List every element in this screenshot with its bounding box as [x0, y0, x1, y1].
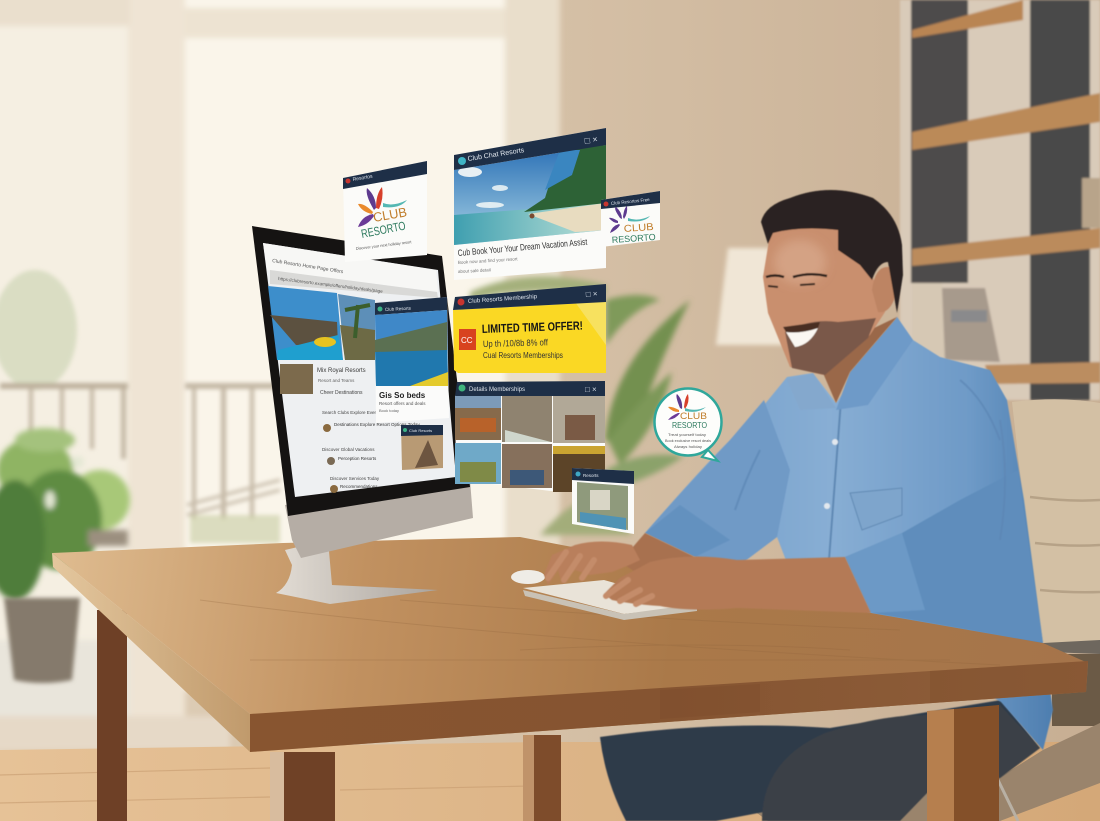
page text column: Recommendations [340, 484, 378, 489]
monitor stand [276, 540, 438, 604]
man: trousers [600, 700, 1040, 821]
floating ad: beach vacation card [454, 128, 606, 280]
table top [52, 537, 1088, 752]
plant behind floating ads [470, 276, 690, 535]
page text column [280, 364, 420, 493]
floating ad: small logo card: CLUB [623, 222, 654, 235]
floating ad: limited time offer banner: LIMITED TIME OFFER! [482, 318, 583, 336]
browser toolbar: Club Resorto Home Page Offers [272, 258, 344, 275]
floating ad: limited time offer banner: □ × [586, 289, 598, 299]
bookshelf [900, 0, 1100, 400]
page text column: Mix Royal Resorts [317, 368, 366, 374]
speech bubble logo [654, 388, 722, 461]
floating ad: club resorto logo card [343, 161, 427, 262]
table legs back [97, 610, 561, 821]
screen overlay ad card [375, 297, 449, 423]
screen overlay ad card: Resort offers and deals [379, 401, 426, 406]
floating ad: small logo card: Club Resortos Free [611, 197, 650, 206]
page text column: Search Clubs Explore Events [322, 410, 381, 415]
floating ad: small photo card [572, 468, 634, 534]
floating ad: club resorto logo card: CLUB [372, 204, 408, 225]
floating ad: club resorto logo card: Discover your next holiday resort [356, 239, 413, 251]
monitor [252, 226, 473, 604]
sleeve and cuff of right arm [845, 470, 1043, 643]
monitor bezel [252, 226, 470, 516]
floating ad: club resorto logo card: RESORTO [360, 219, 407, 241]
speech bubble logo: Treat yourself today [668, 433, 706, 437]
sleeve of left arm [645, 400, 790, 567]
keyboard [523, 580, 697, 620]
floating ad: limited time offer banner: Cual Resorts Memberships [483, 351, 563, 360]
balcony railing and greenery outside window [0, 270, 280, 543]
speech bubble logo: Book exclusive resort deals [665, 439, 711, 443]
floating ad: beach vacation card: □ × [584, 134, 598, 146]
monitor chin [285, 480, 473, 558]
screen overlay ad card: Gis So beds [379, 391, 426, 400]
chair [707, 399, 1100, 821]
floating ad: beach vacation card: Club Chat Resorts [467, 147, 525, 163]
floating ad: photo gallery card: □ × [585, 385, 597, 394]
shirt collar [836, 317, 913, 410]
speech bubble logo: RESORTO [672, 421, 707, 430]
mouse [511, 570, 545, 584]
page text column: Discover Global Vacations [322, 447, 375, 452]
speech bubble logo: Always holiday [674, 445, 702, 449]
page text column: Resort and Teams [318, 378, 355, 383]
floating ad: limited time offer banner: Up th /10/8b 8% off [483, 337, 548, 349]
page text column: Perception Resorts [338, 456, 377, 461]
hero photo: pool [268, 286, 375, 360]
floor [0, 742, 1100, 821]
man: shirt [645, 317, 1053, 750]
floating ad: small photo card: Resorts [583, 473, 599, 478]
man: head [761, 190, 903, 403]
table lamp [716, 248, 790, 345]
floating ad: limited time offer banner [453, 284, 606, 373]
gallery photos [455, 396, 605, 492]
screen small ad card [401, 425, 443, 470]
beach photo [454, 145, 606, 245]
monitor screen [263, 243, 456, 497]
floating ad: limited time offer banner: CC [461, 336, 473, 345]
floating ad: small logo card: RESORTO [611, 232, 656, 245]
screen small ad card: Club Resorts [409, 428, 432, 433]
screen overlay ad card: Book today [379, 408, 399, 413]
page text column: Cheer Destinations [320, 390, 363, 396]
floating ad: photo gallery card [455, 381, 605, 492]
man: arms and hands [544, 533, 871, 613]
floating ad: small logo card [601, 191, 660, 247]
table legs front [270, 705, 999, 821]
floating ad: photo gallery card: Details Memberships [469, 387, 525, 393]
speech bubble logo: CLUB [680, 411, 707, 421]
floating ad: limited time offer banner: Club Resorts Membership [468, 294, 538, 305]
floating ad: club resorto logo card: Resortos [352, 173, 374, 183]
screen overlay ad card: Club Resorts [385, 306, 412, 312]
browser toolbar: https://clubresorto.example/offers/holiday/deals/page [278, 276, 383, 294]
placket and pocket [829, 400, 841, 560]
logo flower [358, 187, 407, 227]
browser toolbar [263, 243, 438, 298]
page text column: Discover Services Today [330, 476, 380, 481]
floating ad: beach vacation card: Book now and find your resort [458, 256, 518, 265]
floating ad: beach vacation card: about sale detail [458, 267, 491, 274]
page text column: Destinations Explore Resort Options Today [334, 422, 420, 427]
floating ad: beach vacation card: Cub Book Your Your Dream Vacation Assist [457, 237, 588, 258]
potted plant left [0, 428, 130, 683]
